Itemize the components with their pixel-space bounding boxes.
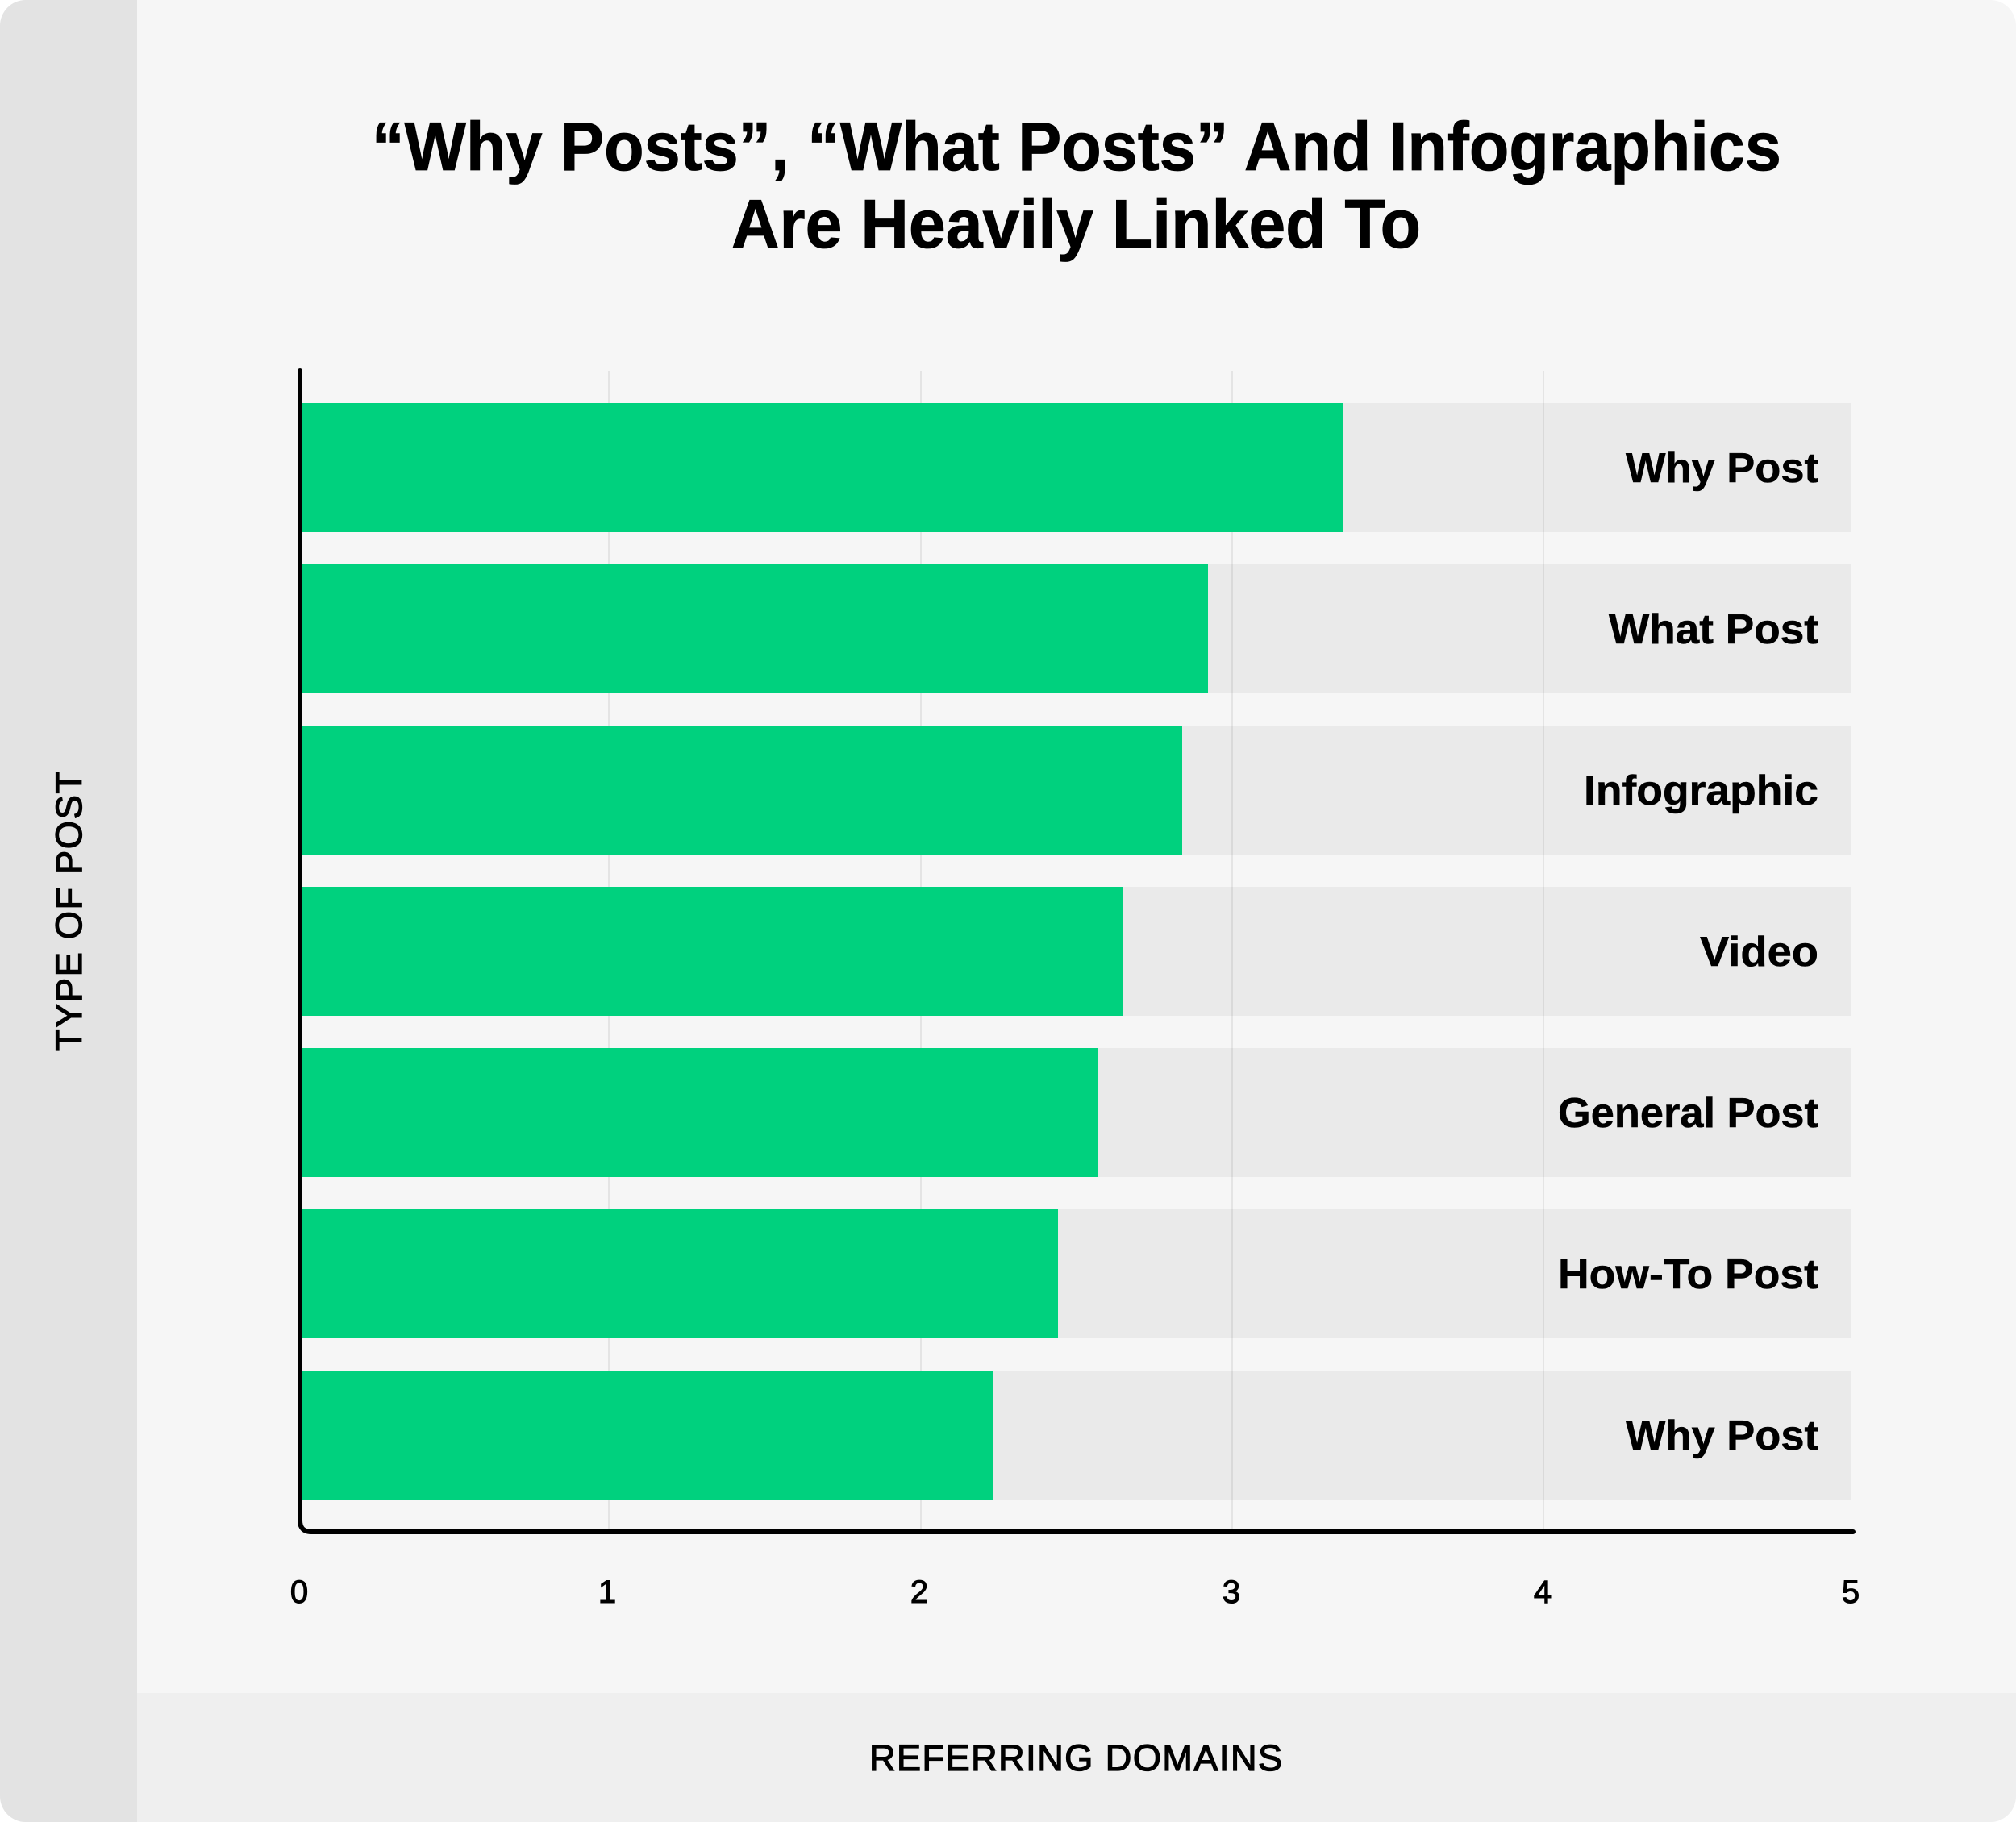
title [372,109,1781,263]
title: Are Heavily Linked To [731,186,1421,263]
x-axis tick labels: 3 [1223,1574,1240,1610]
bar category labels: Why Post [1626,445,1818,492]
chart: bar tracks [302,403,1851,1500]
panel: x-axis label strip [137,1693,2016,1822]
bar: Why Post [302,403,1343,532]
y-axis title: TYPE OF POST [48,772,90,1051]
x-axis tick labels: 5 [1842,1574,1860,1610]
bar: How-To Post [302,1209,1058,1338]
bar category labels: Video [1700,929,1818,975]
bar: Video [302,887,1123,1016]
bar: Infographic [302,726,1182,855]
bar: What Post [302,564,1208,693]
bar category labels: Infographic [1584,767,1818,814]
x-axis title: REFERRING DOMAINS [869,1737,1282,1778]
chart axes [300,371,1853,1532]
panel: y-axis label strip [0,0,137,1822]
x-axis tick labels [290,1574,1860,1610]
bar category labels: Why Post [1626,1412,1818,1459]
bar category labels: What Post [1609,606,1818,653]
bar: General Post [302,1048,1098,1177]
x-axis tick labels: 4 [1534,1574,1552,1610]
title: “Why Posts”, “What Posts” And Infographics [372,109,1781,185]
chart: green bars [302,403,1343,1500]
x-axis tick labels: 1 [598,1574,616,1610]
bar: Why Post (second) [302,1371,993,1500]
x-axis tick labels: 0 [290,1574,308,1610]
bar category labels: How-To Post [1558,1251,1818,1298]
bar category labels [1558,445,1818,1459]
x-axis tick labels: 2 [910,1574,928,1610]
bar category labels: General Post [1558,1090,1818,1137]
